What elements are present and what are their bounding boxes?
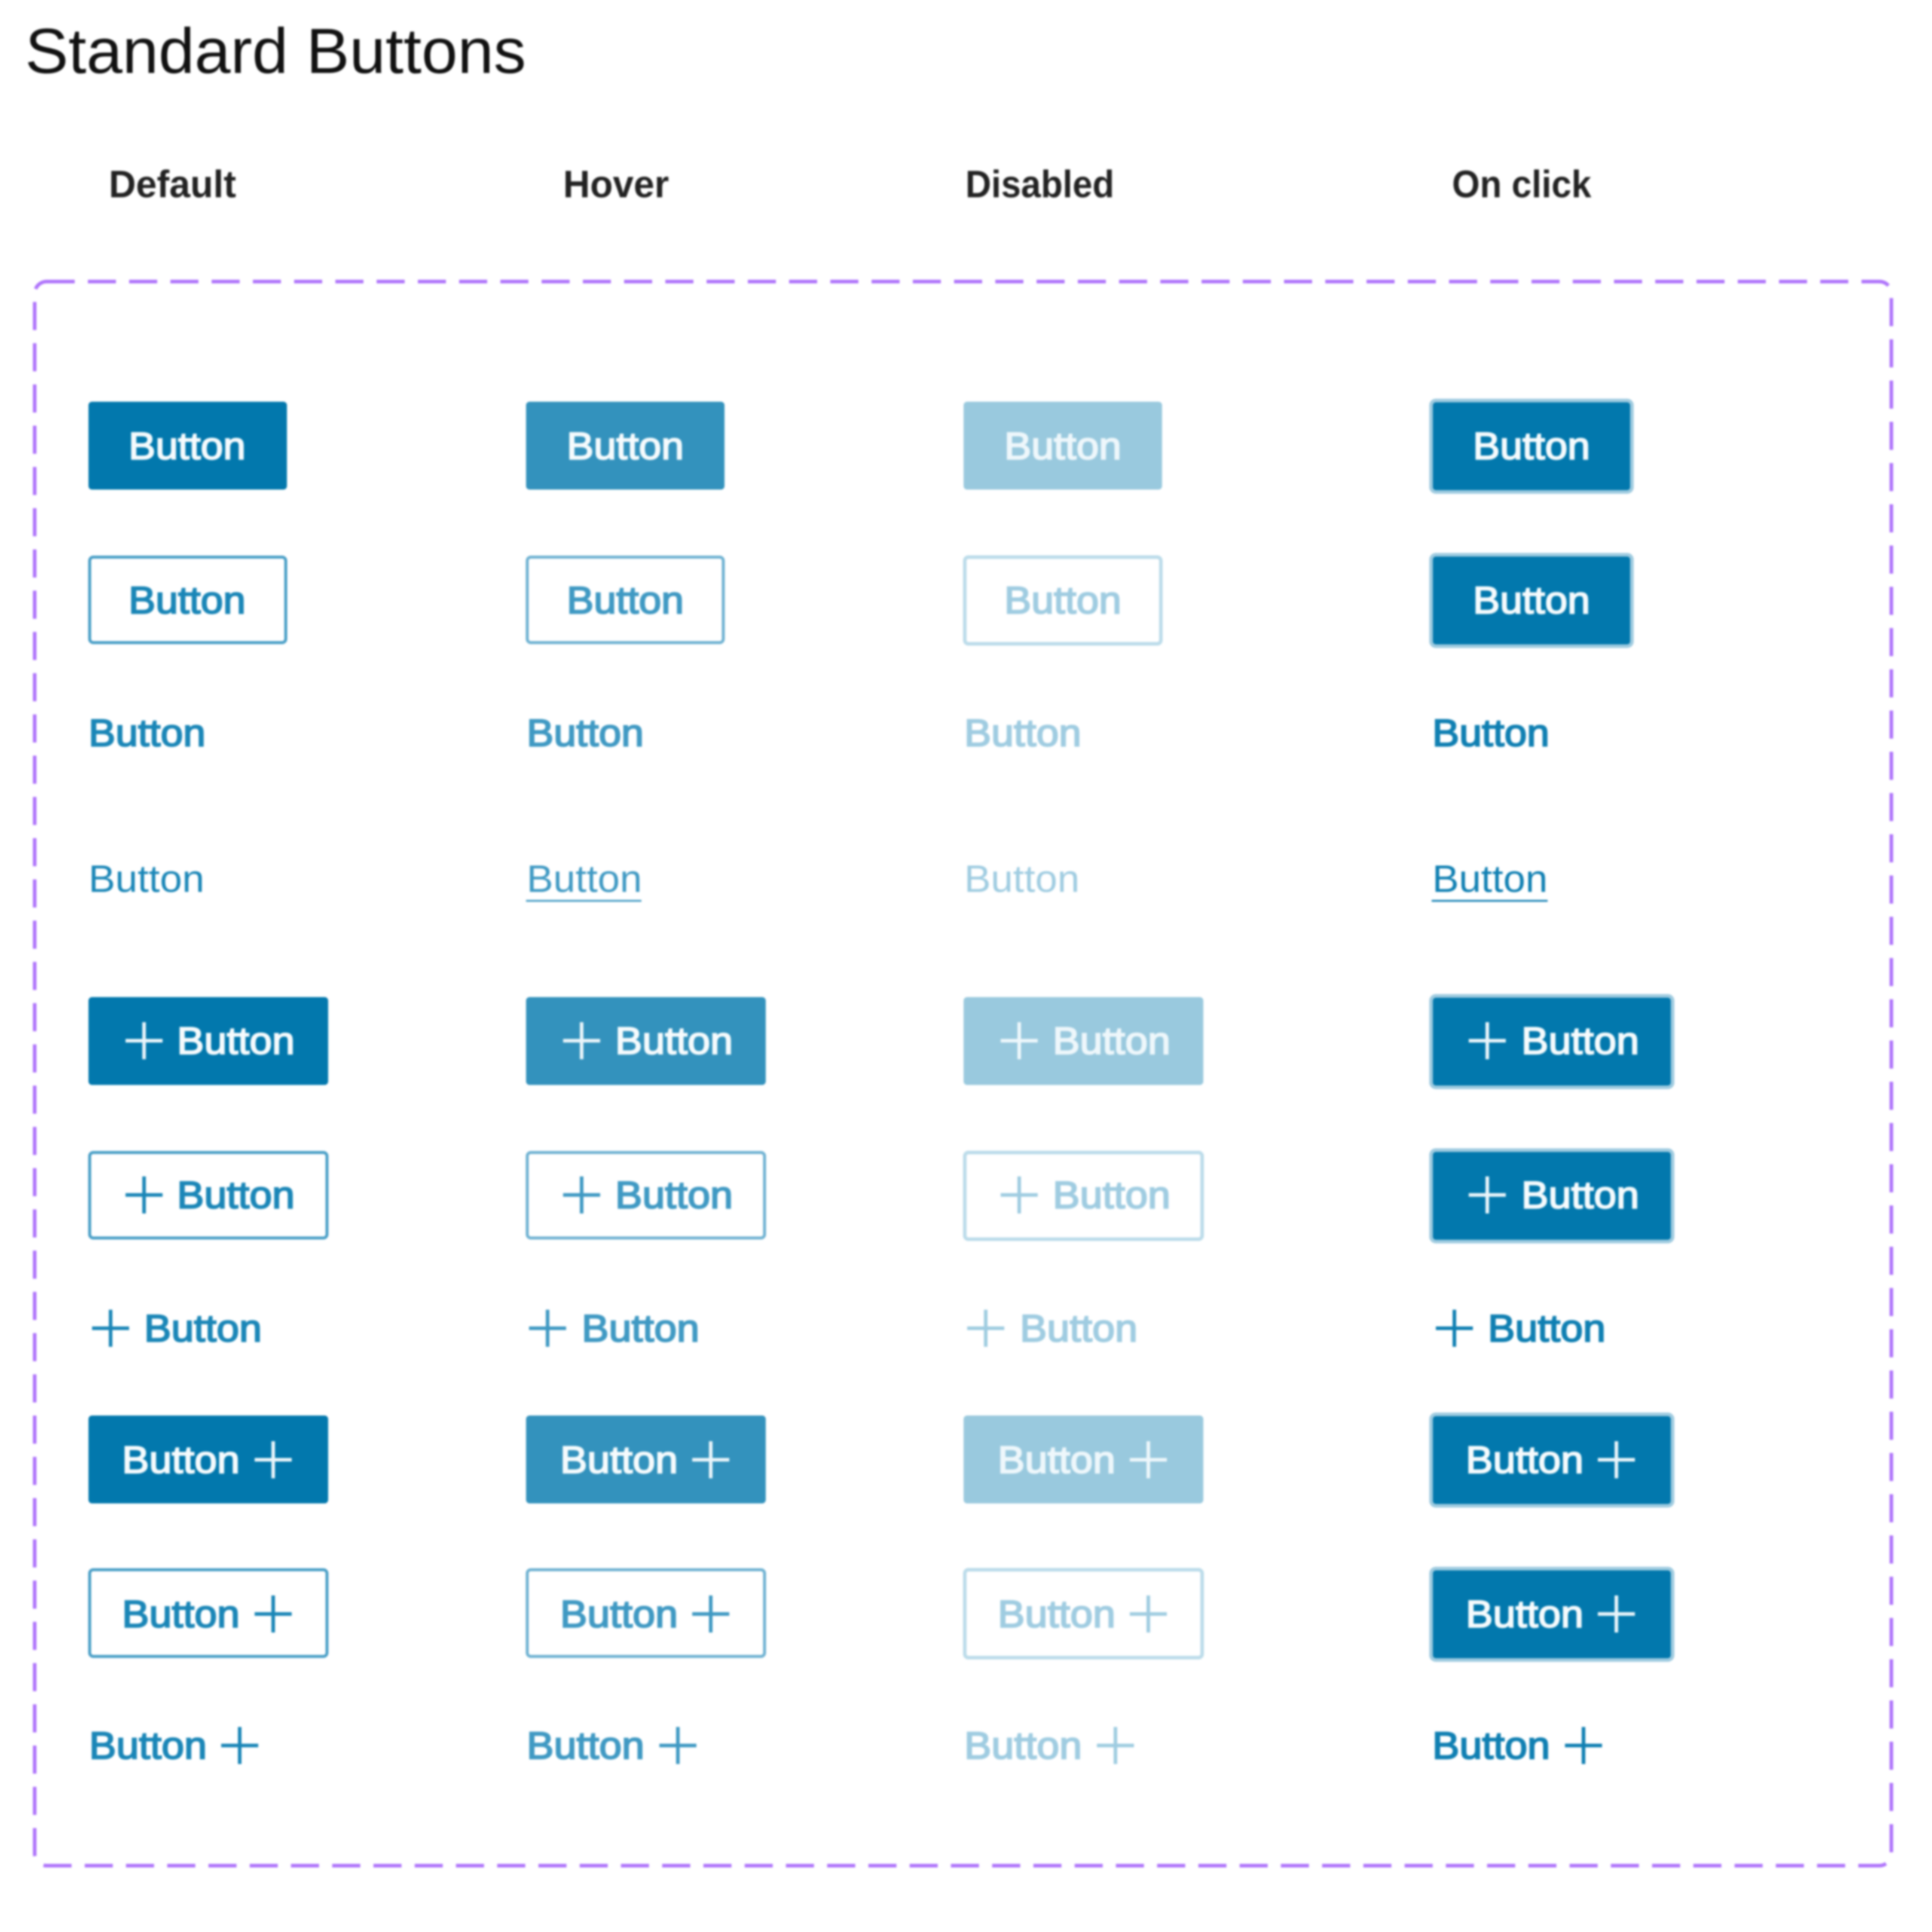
row 5 hover: filled button with leading plus: Button <box>615 1019 733 1062</box>
row 9 disabled: outline button with trailing plus: Button <box>998 1592 1115 1636</box>
row 10 hover: text button with trailing plus <box>527 1724 696 1767</box>
row 10 default: text button with trailing plus <box>89 1724 258 1767</box>
row 8 hover: filled button with trailing plus <box>526 1416 766 1503</box>
row 5 disabled: filled button with leading plus: Button <box>1053 1019 1170 1062</box>
row 6 hover: outline button with leading plus: Button <box>615 1173 733 1216</box>
row 8 default: filled button with trailing plus <box>88 1416 328 1503</box>
row 6 on click: filled button with leading plus: Button <box>1521 1173 1639 1216</box>
row 2 default: outline button: Button <box>129 579 246 622</box>
dashed panel <box>35 282 1891 1866</box>
row 4 on click: underlined link button: Button <box>1432 857 1548 900</box>
row 4 hover: underlined link button: Button <box>527 857 642 900</box>
row 1 disabled: filled button: Button <box>1004 424 1121 467</box>
row 5 default: filled button with leading plus: Button <box>177 1019 295 1062</box>
row 10 disabled: text button with trailing plus: Button <box>964 1724 1082 1767</box>
row 5 on click: filled button with leading plus: Button <box>1521 1019 1639 1062</box>
row 2 disabled: outline button <box>965 557 1161 644</box>
row 8 hover: filled button with trailing plus: Button <box>560 1438 678 1481</box>
row 2 on click: filled button: Button <box>1473 579 1590 622</box>
row 1 hover: filled button <box>526 402 724 490</box>
row 2 on click: filled button <box>1431 555 1632 646</box>
row 8 on click: filled button with trailing plus: Button <box>1466 1438 1583 1481</box>
row 1 on click: filled button <box>1431 401 1632 492</box>
column heading: hover: Hover <box>563 163 669 206</box>
column heading: on click: On click <box>1452 163 1591 206</box>
row 10 default: text button with trailing plus: Button <box>89 1724 207 1767</box>
row 7 hover: text button with leading plus <box>529 1307 699 1350</box>
row 3 hover: bold text button: Button <box>527 711 644 754</box>
row 7 default: text button with leading plus: Button <box>144 1307 262 1350</box>
row 8 on click: filled button with trailing plus <box>1431 1414 1673 1506</box>
row 9 default: outline button with trailing plus: Button <box>122 1592 240 1636</box>
row 7 disabled: text button with leading plus: Button <box>1020 1307 1138 1350</box>
title: Standard Buttons <box>25 15 526 87</box>
row 7 default: text button with leading plus <box>92 1307 262 1350</box>
row 9 hover: outline button with trailing plus: Button <box>560 1592 678 1636</box>
row 6 default: outline button with leading plus <box>90 1153 327 1238</box>
row 5 on click: filled button with leading plus <box>1431 996 1673 1087</box>
row 6 disabled: outline button with leading plus <box>965 1153 1202 1239</box>
column heading: default: Default <box>109 163 236 206</box>
row 8 disabled: filled button with trailing plus: Button <box>998 1438 1115 1481</box>
row 8 disabled: filled button with trailing plus <box>964 1416 1203 1503</box>
row 1 on click: filled button: Button <box>1473 424 1590 467</box>
row 1 default: filled button <box>88 402 287 490</box>
row 8 default: filled button with trailing plus: Button <box>122 1438 240 1481</box>
row 5 disabled: filled button with leading plus <box>964 997 1203 1085</box>
row 9 hover: outline button with trailing plus <box>527 1570 765 1656</box>
row 3 disabled: bold text button: Button <box>964 711 1081 754</box>
row 7 on click: text button with leading plus: Button <box>1488 1307 1606 1350</box>
row 10 on click: text button with trailing plus <box>1432 1724 1602 1767</box>
row 5 hover: filled button with leading plus <box>526 997 766 1085</box>
row 7 disabled: text button with leading plus <box>967 1307 1138 1350</box>
row 10 on click: text button with trailing plus: Button <box>1432 1724 1550 1767</box>
row 4 default: link button: Button <box>88 857 204 900</box>
row 9 on click: filled button with trailing plus: Button <box>1466 1592 1583 1636</box>
row 7 hover: text button with leading plus: Button <box>582 1307 699 1350</box>
row 10 disabled: text button with trailing plus <box>964 1724 1134 1767</box>
row 2 default: outline button <box>90 557 286 643</box>
row 3 on click: bold text button: Button <box>1432 711 1549 754</box>
row 5 default: filled button with leading plus <box>88 997 328 1085</box>
row 9 default: outline button with trailing plus <box>90 1570 327 1656</box>
column heading: disabled: Disabled <box>965 163 1114 206</box>
row 6 default: outline button with leading plus: Button <box>177 1173 295 1216</box>
row 2 disabled: outline button: Button <box>1004 579 1121 622</box>
row 1 hover: filled button: Button <box>567 424 684 467</box>
row 4 disabled: link button: Button <box>964 857 1080 900</box>
row 9 on click: filled button with trailing plus <box>1431 1569 1673 1660</box>
row 3 default: bold text button: Button <box>88 711 206 754</box>
row 1 disabled: filled button <box>964 402 1162 490</box>
row 9 disabled: outline button with trailing plus <box>965 1570 1202 1658</box>
row 2 hover: outline button: Button <box>567 579 684 622</box>
row 6 on click: filled button with leading plus <box>1431 1150 1673 1242</box>
row 1 default: filled button: Button <box>129 424 246 467</box>
row 2 hover: outline button <box>527 557 723 643</box>
row 6 disabled: outline button with leading plus: Button <box>1053 1173 1170 1216</box>
row 6 hover: outline button with leading plus <box>527 1153 765 1238</box>
row 7 on click: text button with leading plus <box>1436 1307 1606 1350</box>
row 10 hover: text button with trailing plus: Button <box>527 1724 644 1767</box>
